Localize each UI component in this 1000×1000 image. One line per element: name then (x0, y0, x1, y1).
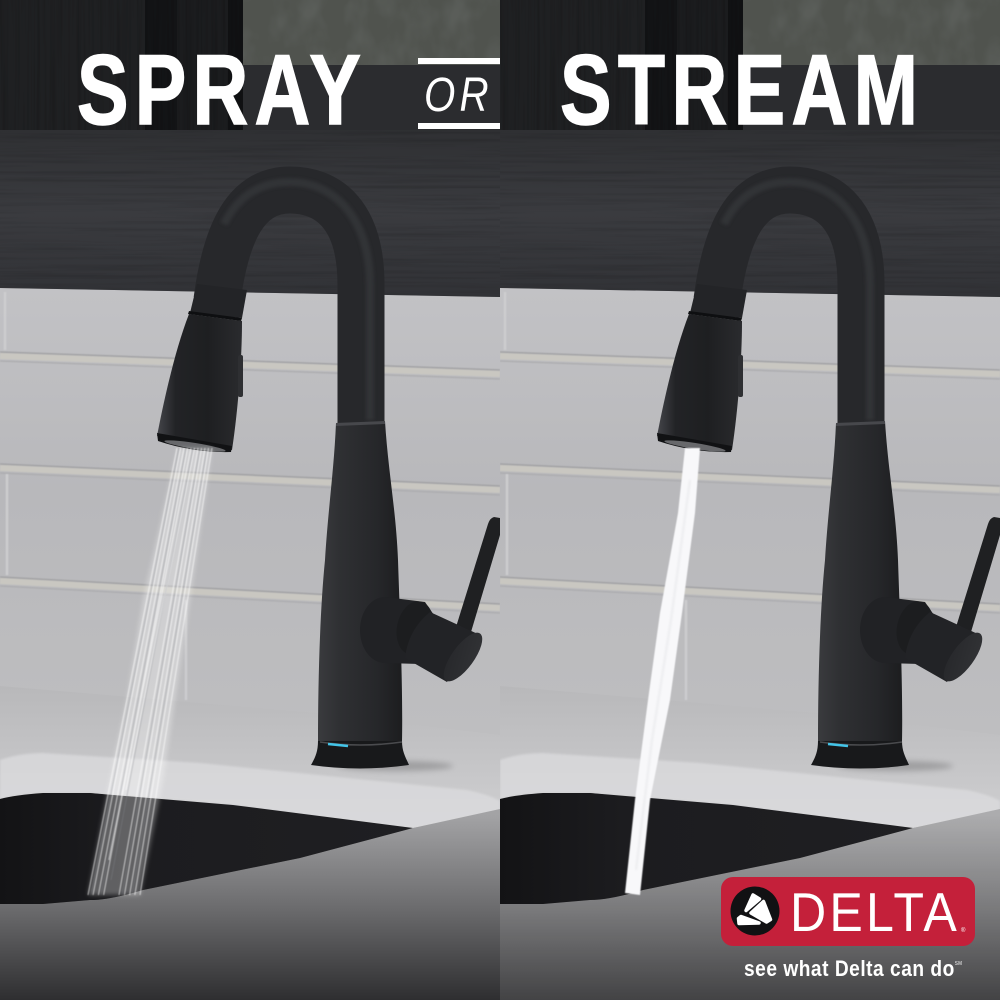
icon: Delta triangle mark (730, 886, 780, 936)
panel: spray scene (left) (0, 0, 500, 1000)
icon: faucet with spray head (157, 182, 500, 771)
heading: SPRAY: SPRAY (77, 35, 367, 145)
panel: stream scene (right) (500, 0, 1000, 1000)
divider: OR (418, 58, 500, 129)
tagline: SM (955, 961, 962, 966)
stream water (625, 448, 700, 895)
tagline: see what Delta can do (744, 957, 955, 981)
logo: Delta: ® (961, 927, 966, 934)
icon: faucet with stream head (657, 182, 1000, 771)
heading: STREAM: STREAM (560, 35, 924, 145)
spray water (88, 448, 212, 895)
wordmark: DELTA (790, 881, 960, 943)
logo: Delta (721, 877, 975, 946)
divider: OR: OR (424, 69, 493, 122)
